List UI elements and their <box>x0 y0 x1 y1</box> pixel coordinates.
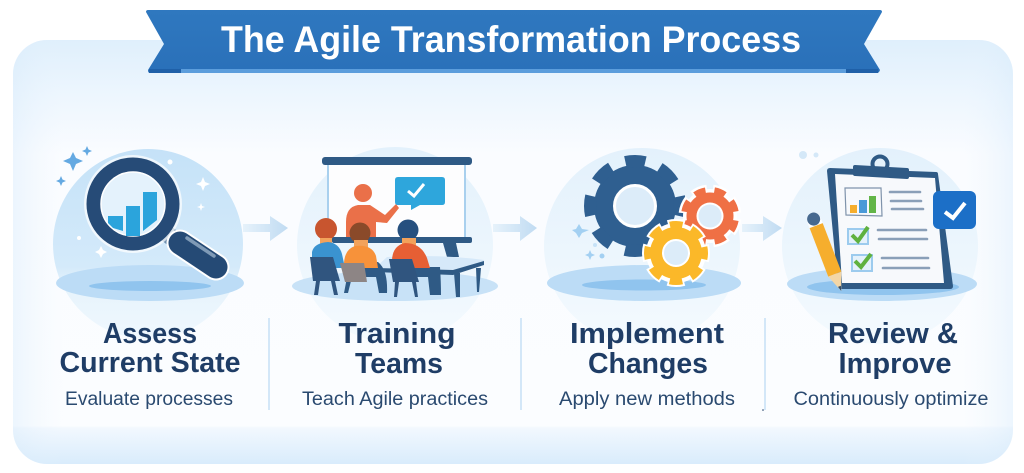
blue check badge <box>933 191 976 229</box>
heading: Review & <box>828 318 958 350</box>
arrow 3 <box>742 216 782 241</box>
title text: The Agile Transformation Process <box>221 19 801 60</box>
checkbox 1 <box>848 227 868 244</box>
arrow 1 <box>243 216 288 241</box>
description: Evaluate processes <box>65 389 233 410</box>
yellow gear <box>646 223 706 283</box>
description: Continuously optimize <box>794 389 988 410</box>
icon: gears <box>544 148 745 344</box>
speech bubble with check <box>395 177 445 210</box>
title banner <box>146 10 882 73</box>
checkbox 2 <box>852 254 872 271</box>
clipboard <box>827 168 953 289</box>
presentation board <box>322 157 472 257</box>
heading <box>338 318 456 380</box>
heading: Improve <box>838 348 952 380</box>
student 1 <box>310 218 345 295</box>
icon: clipboard checklist <box>782 148 978 344</box>
heading: Teams <box>355 348 443 380</box>
heading <box>570 318 724 380</box>
heading: Current State <box>60 347 240 379</box>
large blue gear <box>590 161 680 251</box>
icon: magnifying glass over bar chart <box>53 146 244 339</box>
heading: Changes <box>588 348 708 380</box>
step 2: training teams <box>292 147 498 410</box>
mini bar chart <box>845 188 882 216</box>
pencil <box>805 210 848 293</box>
heading: Training <box>338 318 456 350</box>
icon: classroom training <box>292 147 498 343</box>
text lines <box>878 192 929 268</box>
student 2 <box>340 222 387 293</box>
presenter <box>346 184 399 237</box>
heading: Implement <box>570 318 724 350</box>
step 1: assess current state <box>53 146 244 410</box>
heading <box>60 318 240 379</box>
table <box>374 256 484 297</box>
step 3: implement changes <box>544 148 745 410</box>
description: Apply new methods <box>559 389 735 410</box>
step 4: review and improve <box>782 148 988 410</box>
arrow 2 <box>493 216 537 241</box>
student 3 <box>389 220 441 297</box>
description: Teach Agile practices <box>302 389 488 410</box>
orange gear <box>675 181 745 251</box>
clip <box>853 156 909 179</box>
heading <box>828 318 958 380</box>
heading: Assess <box>103 318 197 350</box>
